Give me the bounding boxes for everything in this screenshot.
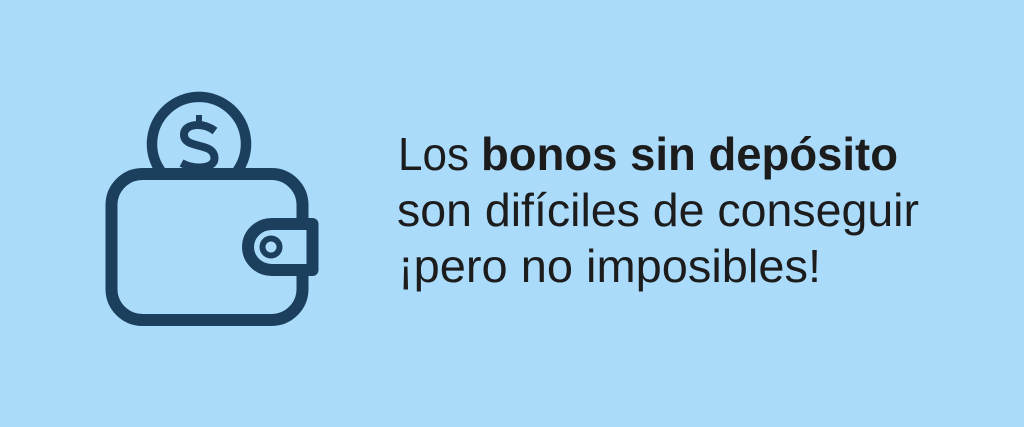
icon: wallet body: [112, 174, 302, 320]
text line 2: son difíciles de conseguir: [397, 184, 919, 236]
icon: wallet clasp: [248, 224, 312, 270]
text block: headline: [397, 128, 919, 292]
text line 1: Los: [398, 128, 469, 180]
icon: clasp button: [262, 238, 280, 256]
icon: coin: [152, 97, 246, 174]
icon: wallet with coin: [112, 97, 312, 320]
text line 3: ¡pero no imposibles!: [398, 240, 821, 292]
text line 1: bonos sin depósito: [481, 128, 898, 180]
icon: dollar sign: [182, 115, 215, 174]
